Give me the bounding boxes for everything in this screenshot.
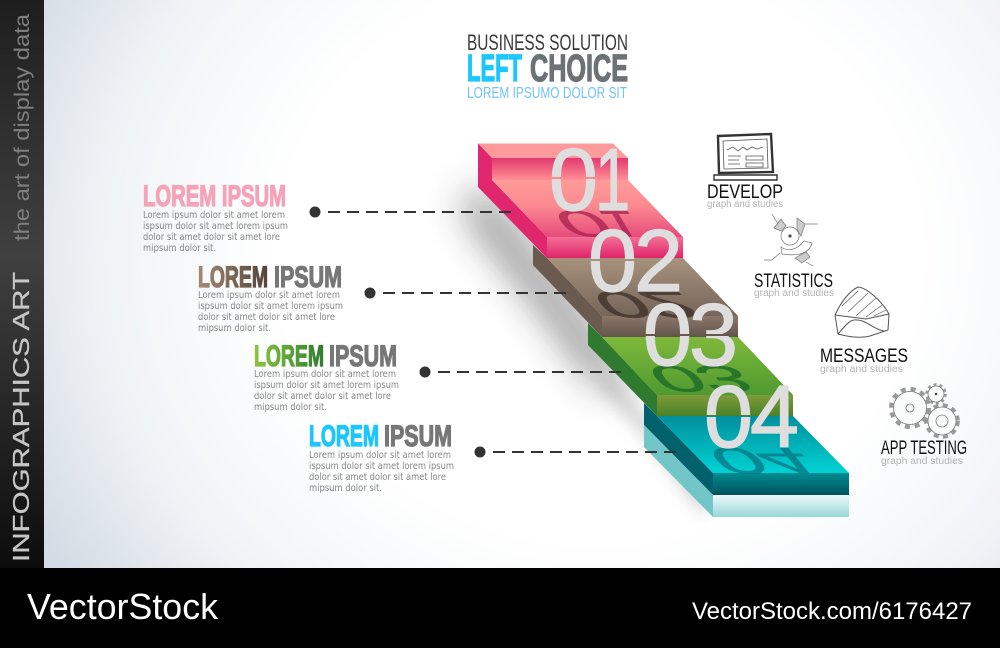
- footer url: VectorStock.com/6176427: [692, 598, 972, 625]
- digit reflections: 0: [542, 203, 625, 244]
- 3D staircase: [478, 130, 849, 517]
- text block 4: IPSUM: [384, 420, 452, 453]
- label: statistics: STATISTICS: [754, 271, 833, 292]
- connector 4: [474, 446, 678, 458]
- text block 3: [254, 340, 399, 413]
- connector 1: [310, 206, 512, 218]
- label: statistics: graph and studies: [754, 288, 834, 299]
- label: develop: [707, 182, 783, 210]
- icon: statistics wheel: [764, 214, 818, 266]
- text block 2: [198, 261, 343, 334]
- digits: 02: [588, 211, 683, 310]
- text block 2: dolor sit amet dolor sit amet lore: [198, 312, 335, 323]
- digit reflections: 04: [697, 440, 826, 481]
- text block 4: mipsum dolor sit.: [309, 483, 382, 494]
- sidebar tagline: the art of display data: [11, 14, 34, 241]
- text block 4: [309, 420, 454, 494]
- digit reflections: 02: [581, 284, 710, 325]
- text block 3: mipsum dolor sit.: [254, 402, 327, 413]
- title line 2: CHOICE: [530, 48, 628, 90]
- left sidebar: [0, 0, 44, 568]
- text block 1: dolor sit amet dolor sit amet lore: [143, 232, 280, 243]
- icon: laptop: [714, 134, 777, 180]
- stack drop shadow: [462, 190, 713, 515]
- text block 1: ispsum dolor sit amet lorem ipsum: [143, 221, 288, 232]
- text block 2: LOREM: [198, 261, 268, 294]
- step 1 front face: [547, 237, 683, 258]
- text block 2: Lorem ipsum dolor sit amet lorem: [198, 290, 340, 301]
- label: messages: MESSAGES: [820, 346, 908, 367]
- title line 3: LOREM IPSUMO DOLOR SIT: [467, 85, 627, 102]
- text block 1: [143, 180, 288, 254]
- text block 1: LOREM IPSUM: [143, 180, 286, 213]
- digits: 0: [549, 130, 598, 229]
- text block 4: dolor sit amet dolor sit amet lore: [309, 472, 446, 483]
- text block 3: ispsum dolor sit amet lorem ipsum: [254, 380, 399, 391]
- text block 2: ispsum dolor sit amet lorem ipsum: [198, 301, 343, 312]
- label: statistics: [754, 271, 834, 299]
- digits: 04: [704, 367, 799, 466]
- label: app testing: [881, 438, 967, 467]
- footer logo: VectorStock: [27, 586, 219, 627]
- step 2 brown: [533, 245, 738, 337]
- title line 2: [467, 48, 628, 90]
- text block 3: dolor sit amet dolor sit amet lore: [254, 391, 391, 402]
- label: app testing: graph and studies: [881, 456, 963, 467]
- connector 3: [420, 366, 622, 378]
- icon: envelope: [835, 287, 889, 337]
- digits: 1: [595, 132, 630, 230]
- text block 4: Lorem ipsum dolor sit amet lorem: [309, 450, 451, 461]
- digit reflections: [542, 203, 826, 481]
- label: develop: graph and studies: [707, 199, 783, 210]
- text block 2: mipsum dolor sit.: [198, 323, 271, 334]
- label: develop: DEVELOP: [707, 182, 783, 203]
- digit reflections: 1: [590, 203, 650, 244]
- connector 2: [364, 288, 567, 298]
- text block 3: Lorem ipsum dolor sit amet lorem: [254, 369, 396, 380]
- step 3 green: [588, 323, 793, 416]
- icon: gears: [891, 384, 958, 437]
- sidebar title: INFOGRAPHICS ART: [8, 272, 34, 562]
- label: messages: graph and studies: [820, 364, 903, 375]
- text block 3: IPSUM: [329, 340, 397, 373]
- step 1 pink: [478, 144, 683, 258]
- text block 3: LOREM: [254, 340, 324, 373]
- label: messages: [820, 346, 908, 375]
- title: [467, 30, 628, 102]
- digits: 03: [643, 285, 738, 384]
- text block 1: Lorem ipsum dolor sit amet lorem: [143, 210, 285, 221]
- digits: [552, 148, 798, 449]
- step 4 teal: [644, 403, 849, 517]
- title line 2: LEFT: [467, 48, 522, 90]
- title line 1: BUSINESS SOLUTION: [467, 30, 628, 55]
- text block 4: LOREM: [309, 420, 379, 453]
- digit reflections: 03: [636, 358, 765, 399]
- footer bar: [0, 568, 1000, 648]
- text block 1: mipsum dolor sit.: [143, 243, 216, 254]
- text block 2: IPSUM: [274, 261, 342, 294]
- text block 4: ispsum dolor sit amet lorem ipsum: [309, 461, 454, 472]
